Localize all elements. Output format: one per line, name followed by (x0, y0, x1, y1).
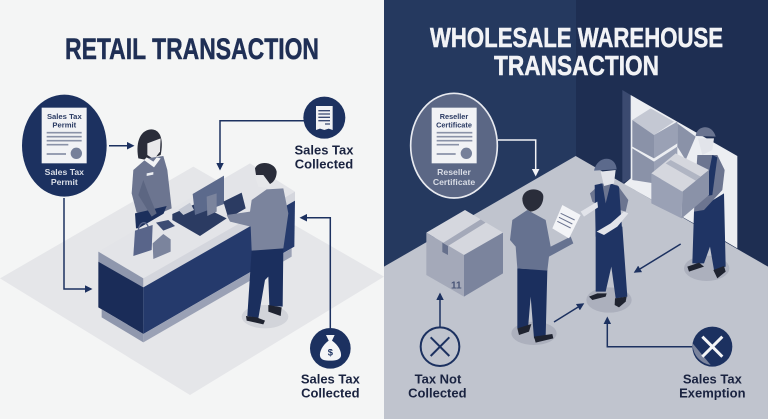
floor diamond (0, 167, 384, 395)
label: sales tax collected top: Sales Tax (295, 143, 354, 158)
label: sales tax exemption: Exemption (679, 385, 746, 400)
label: sales tax exemption (679, 371, 746, 400)
icon: tax not collected (421, 327, 459, 366)
icon: sales tax exemption (692, 327, 732, 367)
retail scene (0, 129, 384, 395)
arrow: certificate to floor (498, 140, 536, 175)
label: sales tax exemption: Sales Tax (683, 371, 743, 386)
customer (227, 163, 288, 328)
arrow: permit to cashier (109, 145, 133, 147)
label: sales tax collected bottom (301, 371, 361, 400)
icon: reseller certificate: Reseller (440, 112, 468, 121)
cashier (132, 129, 172, 228)
floor (384, 156, 768, 419)
warehouse door with stacked boxes (622, 90, 737, 248)
label: sales tax collected bottom: Collected (301, 385, 360, 400)
panel: retail transaction (0, 0, 384, 419)
label: tax not collected: Tax Not (415, 371, 462, 386)
icon: sales tax permit: Permit (52, 120, 77, 129)
icon: reseller certificate: Certificate (433, 177, 475, 187)
heading: wholesale warehouse transaction (430, 22, 723, 81)
icon: reseller certificate: Certificate (436, 120, 472, 129)
icon: receipt (303, 97, 345, 139)
arrow: money to customer (301, 218, 330, 328)
label: tax not collected: Collected (408, 385, 467, 400)
counter (98, 163, 295, 342)
panel: wholesale warehouse transaction (384, 0, 768, 419)
cardboard box (426, 210, 503, 297)
icon: sales tax permit: Permit (51, 177, 78, 187)
cardboard box: 11 (451, 280, 462, 291)
arrow: customer to worker (554, 304, 583, 322)
warehouse scene (384, 90, 768, 419)
worker carrying box (651, 127, 729, 281)
label: sales tax collected bottom: Sales Tax (301, 371, 361, 386)
icon: reseller certificate: Reseller (437, 167, 471, 177)
arrow: tax not collected to box (439, 294, 441, 327)
icon: money bag (310, 328, 351, 369)
worker receiving document (581, 159, 632, 313)
arrow: worker to worker (635, 244, 681, 272)
arrow: exemption to worker (607, 318, 692, 347)
heading: retail transaction: RETAIL TRANSACTION (65, 33, 319, 66)
icon: reseller certificate (411, 93, 497, 198)
label: tax not collected (408, 371, 467, 400)
arrow: permit to counter (64, 198, 91, 289)
icon: sales tax permit: Sales Tax (47, 112, 82, 121)
shopping bags (133, 220, 175, 259)
cash register (172, 176, 246, 236)
arrow: receipt to register (220, 121, 304, 169)
label: sales tax collected top (295, 143, 354, 171)
icon: sales tax permit (22, 95, 107, 197)
label: sales tax collected top: Collected (295, 156, 353, 171)
icon: sales tax permit: Sales Tax (45, 167, 84, 177)
heading: wholesale warehouse transaction: TRANSACTION (494, 50, 659, 81)
icon: money bag: $ (328, 347, 334, 357)
customer with document (510, 189, 581, 345)
